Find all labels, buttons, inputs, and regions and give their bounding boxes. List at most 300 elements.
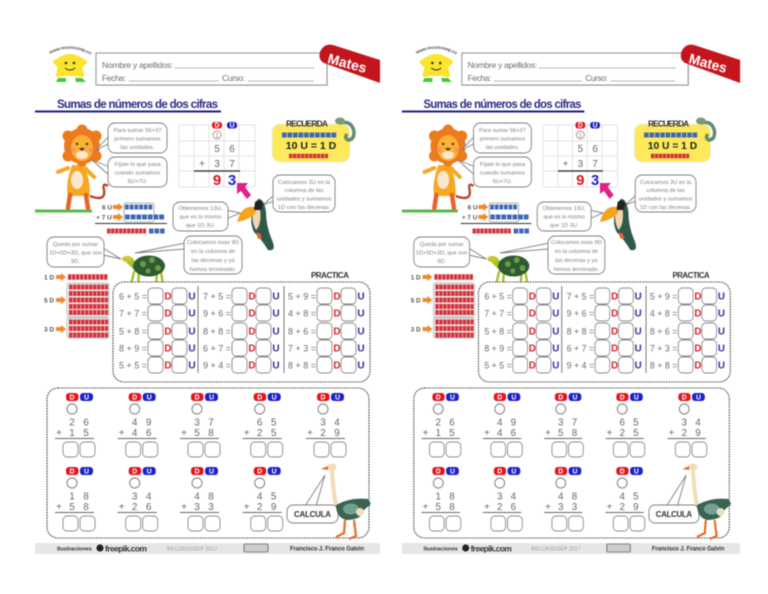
recuerda box: RECUERDA	[286, 118, 328, 128]
panel: practica	[113, 282, 370, 382]
additions row 1: 5	[194, 428, 200, 439]
tens blocks: 1 D	[411, 274, 421, 282]
callout: colocamos 3U: columna de las	[647, 188, 685, 194]
additions row 2: +	[607, 502, 613, 513]
callout: fijate: Fíjate lo que pasa	[480, 162, 526, 168]
callout: colocamos 3U: 1D con las decenas.	[640, 205, 692, 211]
column addition grid	[179, 122, 255, 189]
exercises column 3: 8 + 6 =	[288, 326, 316, 336]
mates ribbon: Mates	[687, 50, 729, 76]
ground line	[402, 210, 458, 212]
additions row 1: 2	[257, 428, 263, 439]
footer: RECURSOSEP 2017	[167, 546, 217, 552]
additions row 1: U	[84, 394, 89, 402]
additions row 1: 4	[497, 428, 503, 439]
exercises column 3: 5 + 9 =	[650, 291, 677, 302]
additions row 1: 4	[334, 418, 340, 428]
ground line	[35, 210, 92, 212]
worksheet: right copy	[401, 44, 741, 554]
additions row 2: 4	[619, 491, 625, 503]
callout: sumar unidades: primero sumamos	[480, 136, 525, 143]
additions row 1: D	[320, 394, 326, 402]
exercises column 2: U	[635, 308, 642, 320]
footer: freepik.com	[471, 543, 512, 554]
additions row 2: U	[272, 468, 277, 476]
column addition grid: +	[563, 159, 569, 170]
additions row 1: 2	[69, 418, 75, 428]
additions row 2: 6	[511, 502, 517, 513]
additions row 1: 3	[682, 417, 687, 429]
exercises column 1: D	[164, 292, 172, 302]
exercises column 3: U	[718, 343, 725, 355]
callout: colocamos 9D	[500, 236, 605, 274]
icon: ostrich	[682, 464, 731, 539]
exercises column 1: U	[552, 326, 559, 338]
exercises column 1: D	[164, 308, 172, 320]
tens blocks: 1 D	[44, 274, 54, 282]
additions row 2: 4	[194, 492, 200, 502]
exercises column 2: U	[635, 291, 642, 303]
additions row 1	[55, 393, 346, 457]
title: Sumas de números de dos cifras	[57, 99, 218, 111]
additions row 1: U	[634, 394, 639, 402]
additions row 2: U	[450, 468, 455, 476]
mascot logo	[48, 46, 92, 83]
callout: colocamos 9D: hemos terminado.	[554, 267, 600, 273]
name and date box	[96, 53, 328, 86]
callout: colocamos 9D: hemos terminado.	[190, 267, 237, 273]
exercises column 1: U	[552, 343, 559, 355]
callout: colocamos 9D: las decenas y ya	[555, 258, 598, 264]
exercises column 1: 8 + 9 =	[119, 344, 147, 354]
additions row 2: +	[56, 502, 62, 513]
callout: obtenemos 13U	[173, 202, 240, 231]
exercises column 1: 5 + 5 =	[119, 360, 147, 370]
exercises column 2: U	[272, 360, 280, 372]
exercises column 2: 6 + 7 =	[567, 343, 594, 354]
additions row 2: 1	[436, 491, 441, 503]
callout: colocamos 3U: unidades y sumamos	[639, 196, 693, 203]
additions row 2: 5	[436, 502, 441, 513]
column addition grid: 6	[592, 144, 598, 155]
additions row 1: D	[682, 394, 687, 402]
tens blocks: 3 D	[411, 326, 421, 334]
additions row 2: 3	[558, 502, 564, 513]
column addition grid: 3	[214, 159, 220, 170]
footer	[35, 543, 380, 554]
additions row 2: 3	[194, 502, 200, 513]
additions row 2: 8	[208, 492, 214, 502]
exercises column 3: U	[357, 326, 365, 338]
recuerda box	[634, 118, 715, 162]
name and date box: Nombre y apellidos:	[102, 60, 173, 70]
icon: toucan	[237, 199, 274, 250]
exercises column 2: 9 + 6 =	[567, 308, 594, 319]
exercises column 3: U	[357, 308, 365, 320]
additions row 1: +	[244, 428, 250, 439]
additions row 1: 4	[132, 418, 138, 428]
additions row 2: 5	[633, 491, 639, 503]
additions row 2: 8	[449, 491, 455, 503]
exercises column 2: D	[611, 343, 618, 355]
exercises column 3: 7 + 3 =	[288, 344, 316, 354]
callout: sumar unidades	[96, 123, 167, 153]
additions row 1: 6	[511, 428, 517, 439]
units blocks sum	[461, 203, 531, 231]
exercises column 1: D	[164, 360, 172, 372]
footer: freepik.com	[105, 544, 147, 554]
additions row 2: U	[634, 468, 639, 476]
callout: queda por sumar: 9D.	[437, 259, 447, 265]
exercises column 2: D	[611, 308, 618, 320]
additions row 1: 4	[132, 428, 138, 439]
exercises column 3: U	[357, 360, 365, 372]
recuerda box: 10 U = 1 D	[286, 140, 337, 152]
name and date box	[462, 53, 689, 86]
exercises column 1: D	[529, 360, 536, 372]
callout: sumar unidades: las unidades.	[486, 145, 520, 151]
column addition grid: 1	[579, 133, 583, 140]
additions row 1: 4	[497, 417, 503, 429]
tens blocks: 5 D	[411, 297, 421, 305]
footer: Ilustraciones	[424, 546, 458, 553]
additions row 2: 8	[449, 502, 455, 513]
additions row 2: 8	[572, 491, 578, 503]
exercises column 1: D	[529, 291, 536, 303]
callout: queda por sumar	[47, 237, 121, 267]
tens blocks: 5 D	[44, 298, 54, 304]
callout: colocamos 9D: Colocamos esas 9D	[187, 240, 239, 246]
column addition grid: D	[578, 122, 583, 130]
exercises column 3: D	[333, 344, 341, 354]
recuerda box: RECUERDA	[648, 118, 689, 129]
units blocks sum: + 7 U	[96, 214, 112, 222]
callout: fijate	[458, 157, 531, 187]
callout: obtenemos 13U	[537, 202, 603, 231]
exercises column 2: D	[611, 326, 618, 338]
callout: colocamos 9D: las decenas y ya	[191, 258, 235, 264]
column addition grid: 1	[215, 134, 219, 140]
column addition grid: 9	[576, 173, 584, 189]
additions row 2: 9	[271, 502, 277, 513]
exercises column 1: 8 + 9 =	[484, 343, 512, 354]
column addition grid: 5	[214, 144, 220, 155]
exercises column 1: U	[552, 360, 559, 372]
exercises column 1: U	[188, 292, 196, 302]
additions row 1: +	[181, 428, 187, 439]
additions row 2: +	[244, 502, 250, 513]
exercises column 2: U	[635, 343, 642, 355]
tens blocks	[44, 273, 109, 338]
additions row 2: 4	[511, 491, 517, 503]
exercises column 3: D	[694, 308, 702, 320]
additions row 1: 3	[320, 418, 326, 428]
additions row 2: U	[84, 468, 89, 476]
exercises column 3: U	[718, 326, 725, 338]
additions row 2: 8	[83, 492, 89, 502]
callout: fijate: Fíjate lo que pasa	[114, 162, 161, 168]
callout: colocamos 3U: unidades y sumamos	[277, 196, 331, 202]
callout: obtenemos 13U: que es lo mismo	[179, 214, 222, 220]
additions row 1: 5	[633, 428, 639, 439]
recuerda box: 10 U = 1 D	[648, 141, 698, 152]
additions row 2: U	[511, 468, 516, 476]
additions row 2: 8	[83, 502, 89, 513]
callout: sumar unidades: Para sumar 56+37	[114, 128, 161, 134]
additions row 2: 4	[558, 491, 564, 503]
additions row 1: +	[423, 428, 429, 439]
additions row 1: 1	[69, 428, 75, 439]
additions row 2: 3	[497, 491, 503, 503]
exercises column 1: 7 + 7 =	[484, 308, 512, 319]
exercises column 1: U	[188, 344, 196, 354]
exercises column 3	[650, 288, 725, 373]
additions row 1: D	[257, 394, 262, 402]
exercises column 2: U	[272, 292, 280, 302]
column addition grid: U	[229, 122, 235, 130]
additions row 2: 9	[633, 502, 639, 513]
additions row 2: 2	[619, 502, 625, 513]
exercises column 3: 8 + 8 =	[288, 360, 316, 370]
additions row 1: 8	[572, 428, 578, 439]
additions row 1: 5	[271, 418, 277, 428]
mascot logo	[415, 46, 458, 83]
callout: colocamos 3U: columna de las	[284, 188, 324, 194]
additions row 2: 2	[257, 502, 263, 513]
column addition grid: 3	[578, 159, 584, 170]
additions row 1: 6	[619, 417, 625, 429]
additions row 2: D	[620, 468, 625, 476]
additions row 1: +	[545, 428, 551, 439]
callout: obtenemos 13U: que 1D 3U.	[186, 223, 216, 229]
exercises column 3: 4 + 8 =	[650, 308, 677, 319]
additions row 1: +	[669, 428, 675, 439]
exercises column 2: D	[248, 308, 256, 320]
exercises column 1: U	[188, 308, 196, 320]
exercises column 2: 9 + 4 =	[203, 360, 231, 370]
heading: practica: PRACTICA	[672, 271, 710, 280]
additions row 1	[422, 393, 707, 457]
additions row 1: 5	[558, 428, 564, 439]
additions row 1: 7	[208, 418, 214, 428]
additions row 2: 2	[132, 502, 138, 513]
exercises column 1: D	[164, 344, 172, 354]
callout: queda por sumar: 9D.	[71, 259, 80, 265]
exercises column 2: U	[635, 326, 642, 338]
additions row 1: 6	[449, 417, 455, 429]
callout: colocamos 9D: en la columna de	[191, 249, 235, 255]
callout: queda por sumar: 1D+5D+3D, que son	[49, 250, 102, 256]
exercises column 2: U	[272, 344, 280, 354]
additions row 2: 1	[69, 492, 75, 502]
callout: colocamos 3U: Colocamos 3U en la	[278, 180, 331, 186]
units blocks sum	[95, 203, 167, 231]
additions row 1: D	[558, 394, 563, 402]
callout: calcula: CALCULA	[294, 510, 331, 519]
callout: fijate: cuando sumamos	[480, 170, 525, 177]
additions row 2: D	[69, 468, 75, 476]
column addition grid	[543, 122, 618, 189]
additions row 2: 4	[146, 492, 152, 502]
exercises column 2: U	[635, 360, 642, 372]
exercises column 3: D	[333, 308, 341, 320]
additions row 1: D	[194, 394, 200, 402]
exercises column 3: D	[694, 360, 702, 372]
additions row 1: 5	[449, 428, 455, 439]
additions row 1: U	[511, 394, 516, 402]
callout: colocamos 3U: 1D con las decenas.	[278, 205, 331, 211]
mates ribbon: Mates	[326, 50, 369, 76]
name and date box: Nombre y apellidos:	[468, 60, 537, 70]
callout: sumar unidades: las unidades.	[120, 145, 155, 151]
exercises column 2: U	[272, 326, 280, 338]
additions row 1: 4	[695, 417, 701, 429]
footer: RECURSOSEP 2017	[531, 546, 581, 553]
callout: colocamos 3U	[625, 175, 696, 212]
callout: colocamos 3U	[263, 175, 335, 212]
callout: fijate	[92, 157, 167, 187]
callout: obtenemos 13U: que es lo mismo	[544, 214, 585, 221]
additions row 1: +	[607, 428, 613, 439]
callout: queda por sumar: 1D+5D+3D, que son	[416, 250, 468, 257]
exercises column 1: 6 + 5 =	[119, 292, 147, 302]
panel: calcula	[47, 388, 371, 539]
additions row 2: U	[209, 468, 214, 476]
additions row 1: U	[209, 394, 214, 402]
additions row 2: U	[147, 468, 152, 476]
exercises column 3: D	[694, 343, 702, 355]
icon: lion	[58, 124, 108, 208]
callout: colocamos 3U: Colocamos 3U en la	[640, 180, 692, 186]
additions row 1: 3	[558, 417, 564, 429]
exercises column 1	[484, 288, 559, 373]
exercises column 3	[288, 288, 365, 373]
panel: calcula	[414, 388, 731, 539]
additions row 2: D	[257, 468, 262, 476]
exercises column 1: U	[188, 360, 196, 372]
units blocks sum: + 7 U	[462, 214, 478, 222]
additions row 2: 5	[271, 492, 277, 502]
exercises column 3: D	[333, 292, 341, 302]
exercises column 1: U	[188, 326, 196, 338]
exercises column 1	[119, 288, 196, 373]
panel: practica	[478, 282, 730, 382]
callout: queda por sumar: Queda por sumar	[53, 242, 98, 248]
additions row 1: 6	[83, 418, 89, 428]
exercises column 2: 7 + 5 =	[567, 291, 594, 302]
worksheet: left copy	[34, 44, 381, 554]
additions row 1: +	[307, 428, 313, 439]
additions row 1: D	[620, 394, 625, 402]
exercises column 1: D	[529, 326, 536, 338]
additions row 2	[422, 467, 645, 531]
additions row 2: D	[194, 468, 200, 476]
column addition grid: D	[214, 122, 220, 130]
footer: Ilustraciones	[57, 546, 92, 552]
additions row 2: 4	[257, 492, 263, 502]
callout: colocamos 9D: Colocamos esas 9D	[551, 240, 602, 246]
exercises column 3: 5 + 9 =	[288, 292, 316, 302]
additions row 1: 2	[682, 428, 687, 439]
exercises column 1: U	[552, 291, 559, 303]
additions row 2: +	[545, 502, 551, 513]
exercises column 2: 7 + 5 =	[203, 292, 231, 302]
callout: sumar unidades: Para sumar 56+37	[479, 128, 526, 134]
exercises column 2: D	[248, 360, 256, 372]
name and date box: Curso:	[222, 73, 245, 83]
additions row 1: 5	[633, 417, 639, 429]
exercises column 1: D	[529, 343, 536, 355]
additions row 2: +	[484, 502, 490, 513]
exercises column 1: 6 + 5 =	[484, 291, 512, 302]
exercises column 1: U	[552, 308, 559, 320]
callout: sumar unidades	[462, 123, 531, 153]
exercises column 3: D	[333, 360, 341, 372]
footer: Francisco J. Franco Galvin	[652, 546, 725, 553]
column addition grid: +	[199, 159, 205, 170]
additions row 2: D	[436, 468, 441, 476]
callout: obtenemos 13U: Obtenemos 13U,	[543, 206, 586, 212]
additions row 1: D	[132, 394, 137, 402]
footer	[402, 543, 740, 554]
callout: calcula: CALCULA	[656, 510, 692, 519]
additions row 1: 2	[320, 428, 326, 439]
additions row 2: U	[572, 468, 577, 476]
additions row 1: U	[147, 394, 152, 402]
exercises column 2: 9 + 4 =	[567, 360, 594, 371]
additions row 2: +	[181, 502, 187, 513]
column addition grid: 6	[229, 144, 235, 155]
exercises column 1: D	[164, 326, 172, 338]
mates ribbon	[681, 45, 740, 83]
additions row 1: +	[484, 428, 490, 439]
column addition grid: 5	[578, 144, 584, 155]
exercises column 2: 8 + 8 =	[203, 326, 231, 336]
exercises column 3: 4 + 8 =	[288, 308, 316, 318]
additions row 1: +	[56, 428, 62, 439]
additions row 1: U	[696, 394, 701, 402]
callout: calcula	[649, 475, 699, 523]
callout: colocamos 9D	[135, 236, 242, 274]
units blocks sum: 6 U	[468, 204, 478, 212]
additions row 1: 2	[436, 417, 441, 429]
exercises column 2: U	[272, 308, 280, 320]
column addition grid: U	[593, 122, 598, 130]
exercises column 2: D	[611, 291, 618, 303]
exercises column 3: 8 + 8 =	[650, 360, 677, 371]
additions row 1: 9	[511, 417, 517, 429]
additions row 1: 9	[146, 418, 152, 428]
column addition grid: 7	[592, 159, 598, 170]
callout: colocamos 9D: en la columna de	[555, 249, 598, 255]
additions row 1: U	[272, 394, 277, 402]
exercises column 3: U	[718, 308, 725, 320]
icon: toucan	[600, 199, 636, 250]
exercises column 3: U	[357, 344, 365, 354]
callout: obtenemos 13U: Obtenemos 13U,	[179, 206, 223, 212]
additions row 1: 8	[208, 428, 214, 439]
additions row 2	[55, 467, 283, 531]
units blocks sum: 6 U	[102, 204, 112, 212]
exercises column 3: D	[694, 326, 702, 338]
arrow: pink	[600, 183, 614, 199]
exercises column 3: U	[718, 291, 725, 303]
exercises column 2: 8 + 8 =	[567, 326, 594, 337]
exercises column 3: 8 + 6 =	[650, 326, 677, 337]
icon: lion	[425, 124, 474, 208]
exercises column 2: D	[248, 326, 256, 338]
additions row 1: U	[450, 394, 455, 402]
